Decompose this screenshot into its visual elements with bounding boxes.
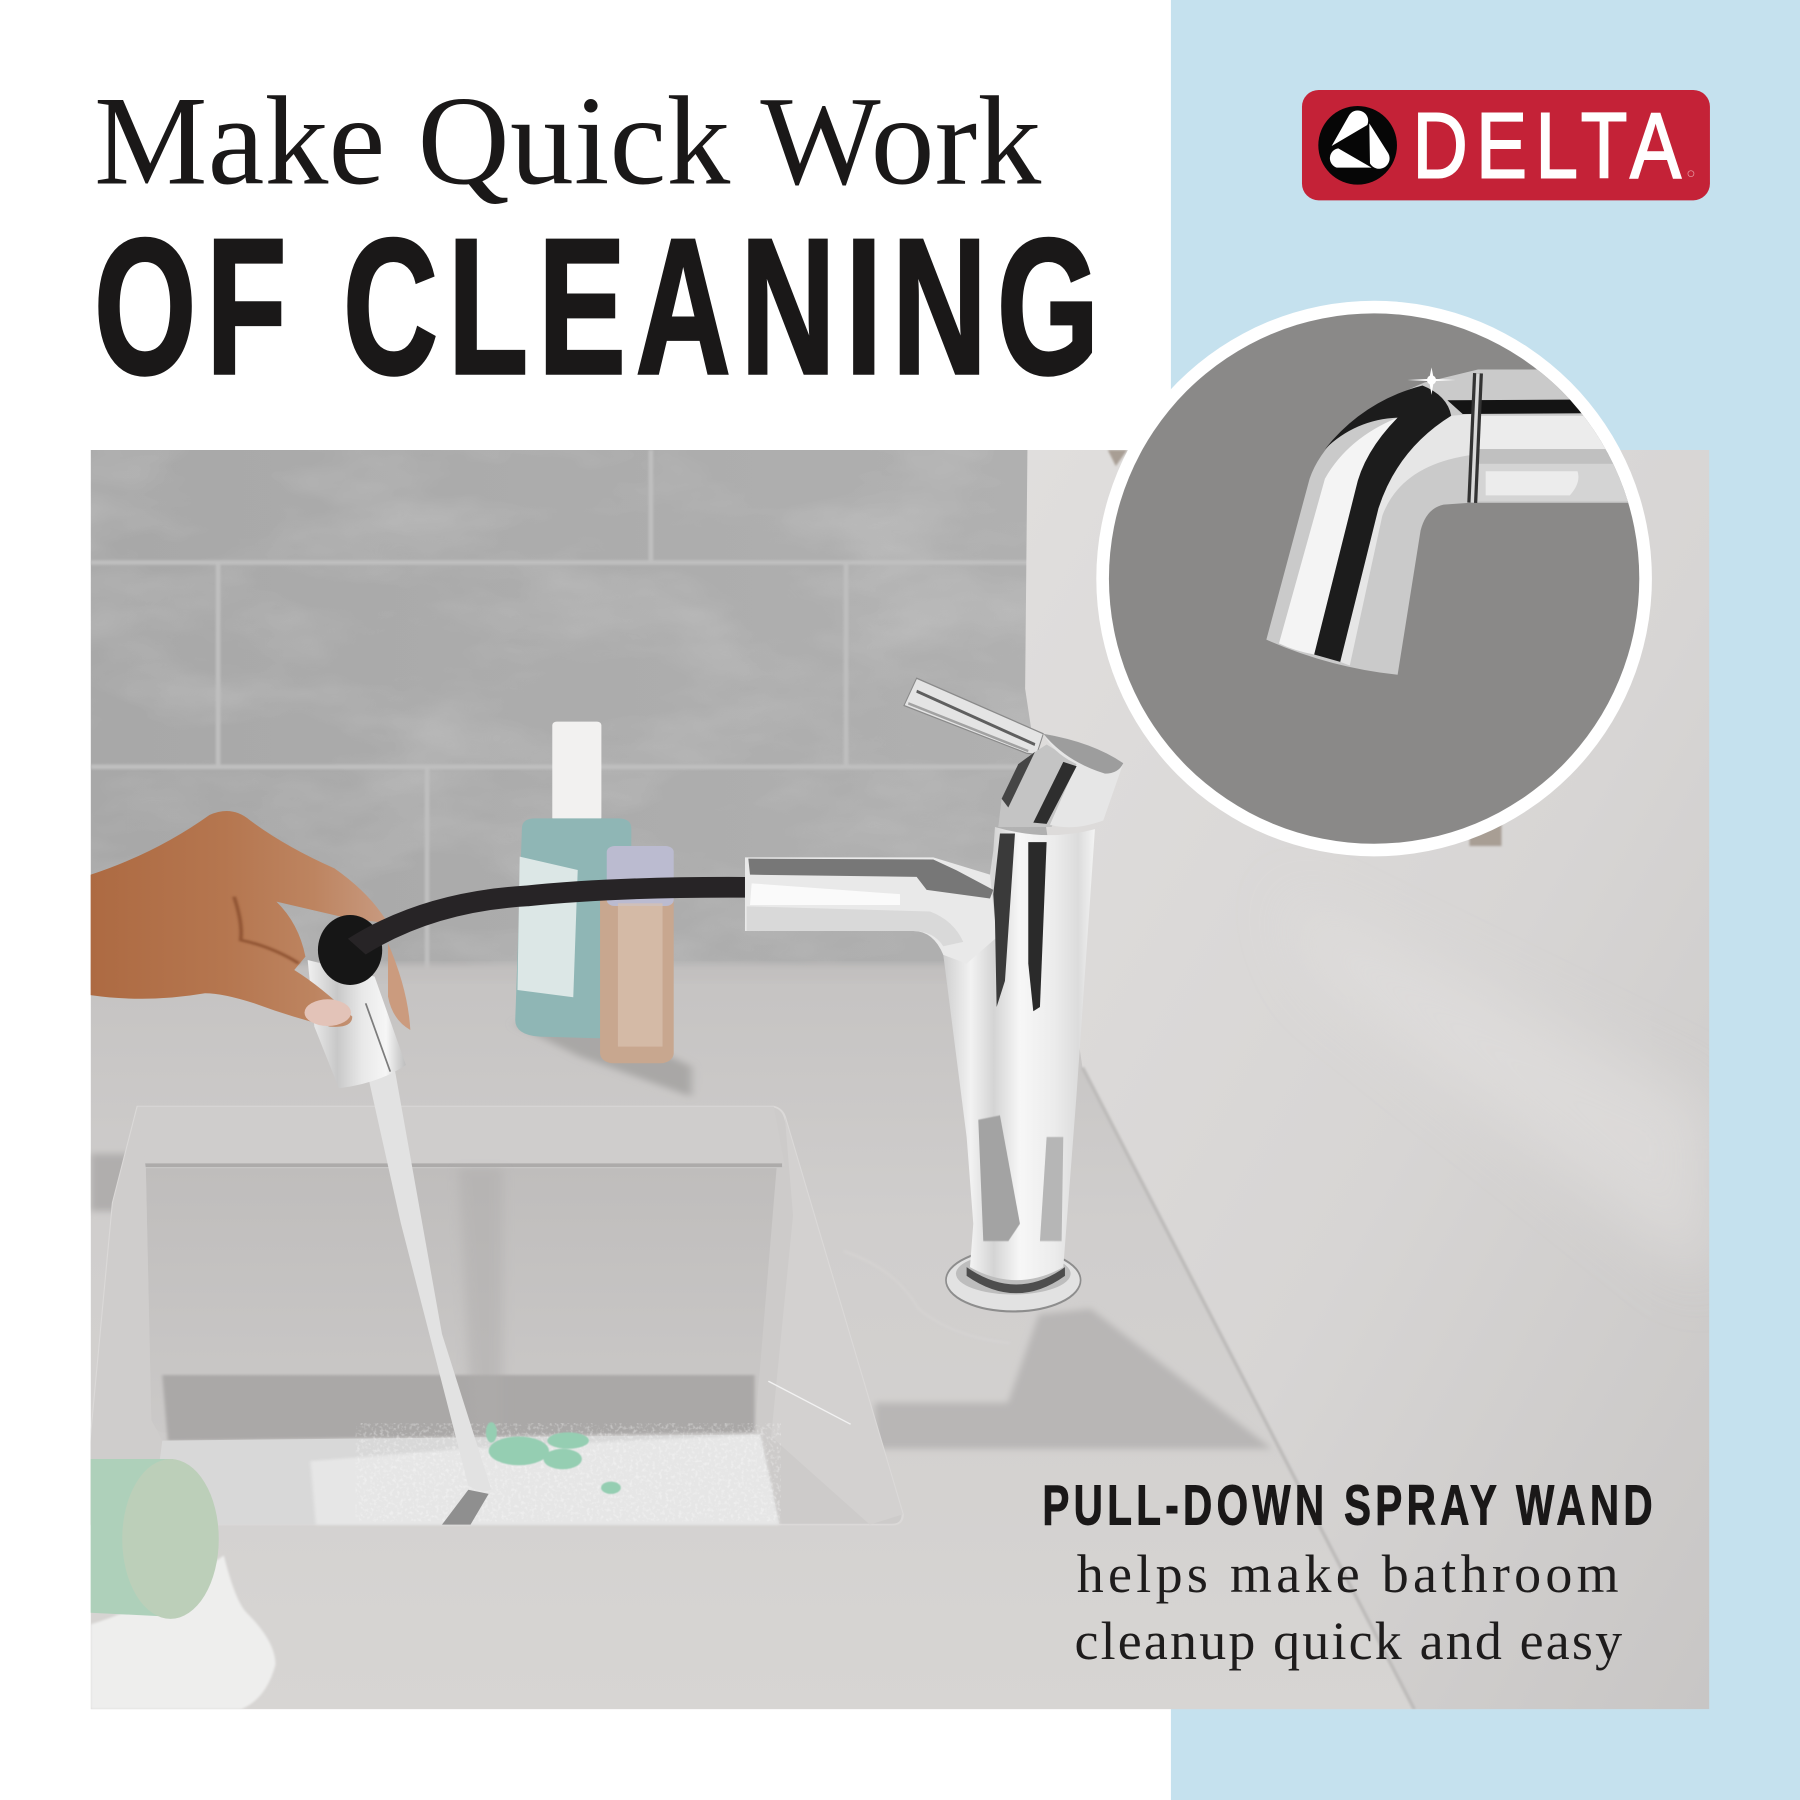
faucet xyxy=(745,678,1123,1311)
hand xyxy=(90,811,410,1030)
faucet cast shadow xyxy=(875,1309,1272,1449)
counter shadow left xyxy=(90,1152,124,1214)
inset circle ring xyxy=(1096,301,1652,856)
inset: spout closeup xyxy=(1091,298,1665,872)
handle cap xyxy=(1043,734,1123,827)
handle neck xyxy=(998,745,1078,827)
inset sparkle xyxy=(1407,367,1456,395)
sink basin xyxy=(90,1107,903,1525)
jar xyxy=(90,1459,219,1619)
wall bracket detail xyxy=(1108,450,1502,846)
caption xyxy=(1042,1475,1657,1671)
chrome reflections xyxy=(747,752,1077,1241)
counter top xyxy=(91,970,1468,1709)
title: serif line: Make Quick Work xyxy=(94,70,1041,212)
inset background tile xyxy=(1091,298,1665,872)
caption: line three: cleanup quick and easy xyxy=(1074,1611,1622,1671)
photo: bathroom vanity scene xyxy=(90,450,1709,1709)
lever handle xyxy=(904,678,1043,755)
inset chrome spout xyxy=(1266,370,1654,675)
towel xyxy=(91,1555,276,1709)
horizontal spout xyxy=(745,857,997,964)
foam specks green xyxy=(486,1422,621,1494)
blue side panel xyxy=(1171,0,1800,1800)
foam texture xyxy=(356,1423,781,1521)
hose xyxy=(318,887,745,985)
handle cap top xyxy=(1043,734,1123,774)
title: bold line: OF CLEANING xyxy=(94,199,1109,414)
wall and counter edge xyxy=(1083,1068,1414,1709)
backsplash ledge xyxy=(294,963,945,970)
spray wand xyxy=(308,960,406,1088)
counter swirl reflection xyxy=(844,1251,1010,1343)
side wall xyxy=(1025,450,1709,1709)
bottles xyxy=(513,722,692,1097)
logo: Delta xyxy=(1302,90,1710,200)
faucet column xyxy=(933,827,1095,1280)
caption: bold heading: PULL-DOWN SPRAY WAND xyxy=(1042,1475,1657,1537)
faucet base xyxy=(946,1249,1081,1311)
wall light sheen xyxy=(1548,1074,1695,1228)
water stream xyxy=(365,1064,491,1525)
tiled back wall xyxy=(91,450,1055,990)
caption: line two: helps make bathroom xyxy=(1077,1544,1619,1604)
logo: Delta: DELTA xyxy=(1413,94,1689,198)
